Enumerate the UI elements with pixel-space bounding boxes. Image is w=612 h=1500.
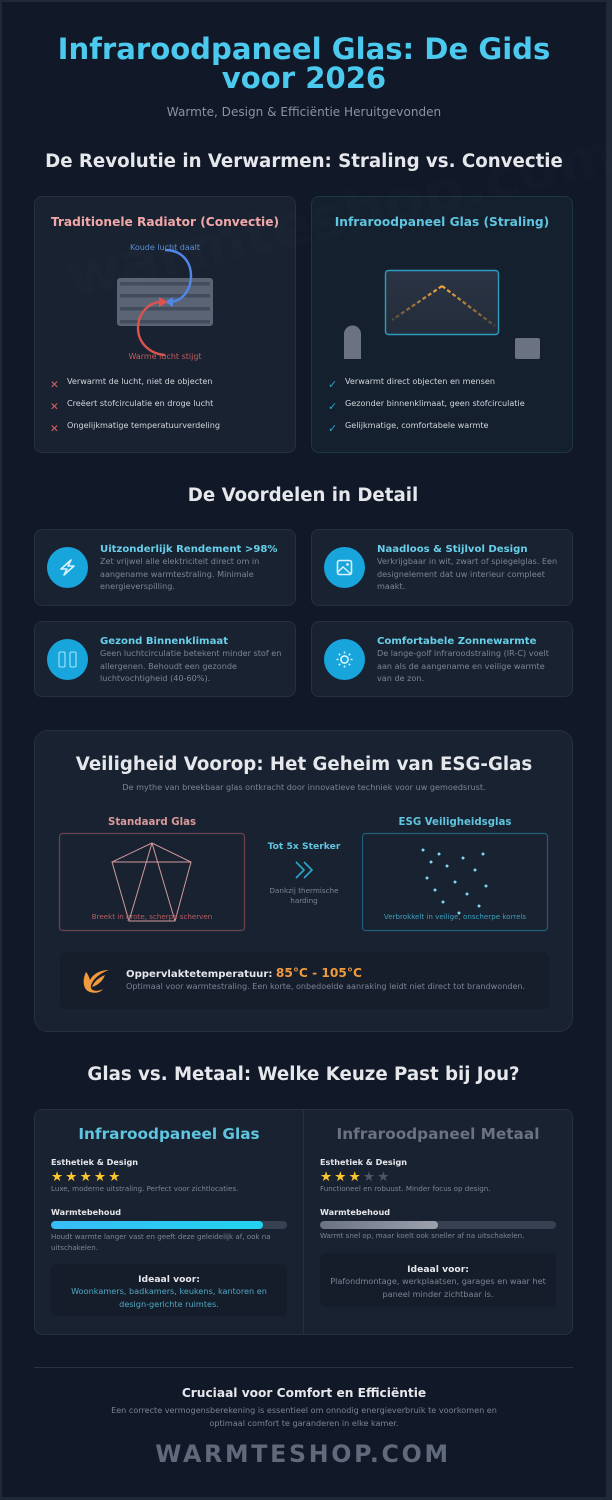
footer text: Een correcte vermogensberekening is essentieel om onnodig energieverbruik te voorkomen en [111,1405,497,1415]
check icon 1: ✓ [328,378,337,390]
list item 3: Ongelijkmatige temperatuurverdeling [67,420,220,430]
ideal text: Plafondmontage, werkplaatsen, garages en waar het [330,1276,546,1286]
footer heading: Cruciaal voor Comfort en Efficiëntie [182,1386,426,1400]
radiator diagram: Koude lucht daalt [130,243,200,252]
label warmtebehoud: Warmtebehoud [320,1207,390,1217]
radiator diagram: Warme lucht stijgt [128,352,202,361]
benefit text: designelement dat uw interieur compleet [377,569,545,579]
benefit text [100,648,281,683]
strength note: harding [290,896,318,905]
label esthetiek: Esthetiek & Design [51,1157,138,1167]
icon: image [324,547,365,588]
heading: glas vs metaal: Glas vs. Metaal: Welke Keuze Past bij Jou? [87,1064,520,1085]
icon: lightning [47,547,88,588]
benefit text [377,648,549,683]
ideal text: Woonkamers, badkamers, keukens, kantoren en [71,1286,267,1296]
benefit text [100,556,259,591]
title: Infraroodpaneel Glas: De Gids [58,32,550,66]
standard glass heading: Standaard Glas [108,817,196,828]
label esthetiek: Esthetiek & Design [320,1157,407,1167]
benefit text: maakt. [377,581,405,591]
panel: veiligheid [34,730,573,1032]
temperature text: Optimaal voor warmtestraling. Een korte, onbedoelde aanraking leidt niet direct tot brandwonden. [126,981,525,991]
icon: flame [84,970,109,993]
esthetiek text: Luxe, moderne uitstraling. Perfect voor zichtlocaties. [51,1184,238,1193]
ideal text: paneel minder zichtbaar is. [383,1288,493,1298]
esthetiek text: Functioneel en robuust. Minder focus op design. [320,1184,491,1193]
cross icon 3: ✕ [50,422,59,434]
benefit text: Geen luchtcirculatie betekent minder stof en [100,648,281,658]
ideal heading: Ideaal voor: [138,1274,200,1285]
warmtebehoud text: uitschakelen. [51,1243,98,1252]
safety diagrams [58,832,548,932]
temperature heading: Oppervlaktetemperatuur: 85°C - 105°C [126,966,362,980]
benefit title: Uitzonderlijk Rendement >98% [100,544,278,554]
benefit text: luchtvochtigheid (40-60%). [100,673,210,683]
strength note [269,886,339,905]
cross icon 2: ✕ [50,400,59,412]
glass heading: Infraroodpaneel Glas (Straling) [335,215,549,229]
icon: columns [47,639,88,680]
column: metaal [320,1125,556,1298]
safety heading: Veiligheid Voorop: Het Geheim van ESG-Glas [76,754,532,775]
temperature callout [60,952,549,1009]
standard glass caption: Breekt in grote, scherpe scherven [92,912,212,921]
label warmtebehoud: Warmtebehoud [51,1207,121,1217]
safety subtitle: De mythe van breekbaar glas ontkracht door innovatieve techniek voor uw gemoedsrust. [122,782,486,792]
ideal text [71,1286,267,1309]
warmtebehoud text [51,1232,271,1252]
check icon 2: ✓ [328,400,337,412]
benefit text: allergenen. Behoudt een gezonde [100,661,237,671]
radiator diagram [117,243,213,361]
list item 2: Creëert stofcirculatie en droge lucht [67,398,213,408]
brand: WARMTESHOP.COM [155,1440,451,1468]
footer text [111,1405,497,1428]
benefit text: van de zon. [377,673,424,683]
radiator heading: Traditionele Radiator (Convectie) [51,215,279,229]
cross icon 1: ✕ [50,378,59,390]
warmtebehoud text: Warmt snel op, maar koelt ook sneller af na uitschakelen. [320,1230,524,1240]
glass diagram [344,270,540,359]
benefit text: Verkrijgbaar in wit, zwart of spiegelglas. Een [377,556,557,566]
benefit text: De lange-golf infraroodstraling (IR-C) voelt [377,648,549,658]
ideal box [51,1264,287,1316]
benefit title: Gezond Binnenklimaat [100,636,228,646]
ideal heading: Ideaal voor: [407,1264,469,1275]
panel: benefit rendement [34,529,296,606]
list item 3: Gelijkmatige, comfortabele warmte [345,420,488,430]
esg heading: ESG Veiligheidsglas [399,817,511,828]
heading: revolutie: De Revolutie in Verwarmen: Straling vs. Convectie [45,151,563,172]
strength label: Tot 5x Sterker [268,841,340,852]
ideal box [320,1253,556,1307]
glas title: Infraroodpaneel Glas [78,1125,260,1143]
panel: benefit design [311,529,573,606]
stars: ★★★★★ [51,1169,123,1185]
benefit text: aangename warmtestraling. Minimale [100,569,254,579]
panel: radiator [34,196,296,453]
warmtebehoud text: Houdt warmte langer vast en geeft deze geleidelijk af, ook na [51,1232,271,1241]
panel: glass panel [311,196,573,453]
footer text: optimaal comfort te garanderen in elke kamer. [209,1418,399,1428]
title [58,32,550,95]
benefit text [377,556,557,591]
panel: benefit klimaat [34,621,296,697]
metaal title: Infraroodpaneel Metaal [337,1125,539,1143]
strength note: Dankzij thermische [269,886,339,895]
icon: sun [324,639,365,680]
footer divider [34,1367,573,1368]
list item 1: Verwarmt de lucht, niet de objecten [67,376,212,386]
benefit title: Naadloos & Stijlvol Design [377,544,528,554]
list item 1: Verwarmt direct objecten en mensen [345,376,495,386]
title: voor 2026 [222,61,386,95]
ideal text [330,1276,546,1298]
subtitle: Warmte, Design & Efficiëntie Heruitgevonden [167,105,441,119]
esg caption: Verbrokkelt in veilige, onscherpe korrels [384,912,526,921]
list item 2: Gezonder binnenklimaat, geen stofcirculatie [345,398,525,408]
bar 50% [320,1221,556,1229]
bar 90% [51,1221,287,1229]
ideal text: design-gerichte ruimtes. [119,1299,219,1309]
panel: comparison [34,1109,573,1335]
benefit text: Zet vrijwel alle elektriciteit direct om in [100,556,259,566]
benefit title: Comfortabele Zonnewarmte [377,636,536,646]
benefit text: aan als de aangename en veilige warmte [377,661,545,671]
column divider [303,1110,304,1334]
heading: voordelen: De Voordelen in Detail [188,485,418,506]
column: glas [51,1125,287,1309]
panel: benefit zon [311,621,573,697]
check icon 3: ✓ [328,422,337,434]
stars: ★★★★★ [320,1169,392,1185]
benefit text: energieverspilling. [100,581,175,591]
